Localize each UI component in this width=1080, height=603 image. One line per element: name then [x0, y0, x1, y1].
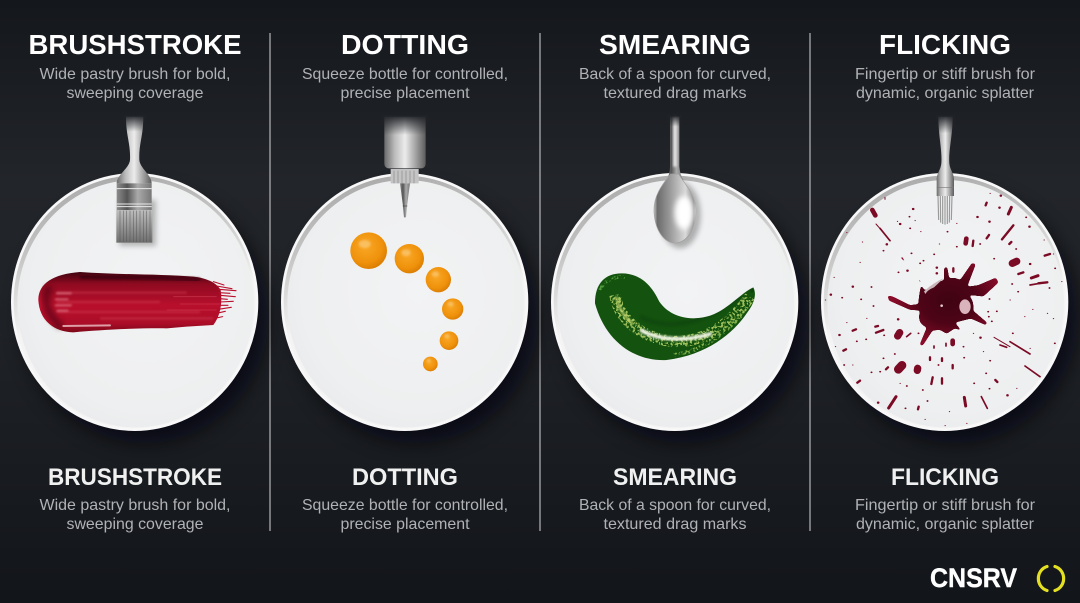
description: smearing: Back of a spoon for curved,	[579, 66, 771, 83]
description: dotting: Squeeze bottle for controlled,	[302, 66, 508, 83]
lower heading: smearing: SMEARING	[613, 464, 737, 491]
description: brushstroke: sweeping coverage	[66, 85, 204, 102]
panel: smearing	[551, 29, 809, 533]
panel: dotting	[281, 29, 539, 533]
plate with splatter	[821, 115, 1079, 443]
panel: brushstroke	[11, 29, 269, 533]
lower description: smearing: textured drag marks	[604, 516, 746, 533]
description: dotting: precise placement	[340, 85, 470, 102]
divider lines	[270, 33, 810, 531]
lower description: smearing: Back of a spoon for curved,	[579, 497, 771, 514]
description: flicking: dynamic, organic splatter	[856, 85, 1035, 102]
plate with red brush stroke	[11, 115, 269, 443]
heading: smearing: SMEARING	[599, 29, 751, 60]
lower description: dotting: precise placement	[340, 516, 470, 533]
lower description: flicking: dynamic, organic splatter	[856, 516, 1035, 533]
icon: squeeze bottle	[382, 115, 428, 217]
sauce: six orange dots	[350, 232, 463, 371]
icon: pastry brush	[116, 115, 156, 246]
heading: dotting: DOTTING	[341, 29, 469, 60]
description: brushstroke: Wide pastry brush for bold,	[40, 66, 230, 83]
icon: logo ring	[1038, 566, 1064, 590]
plate with orange dots	[281, 115, 539, 443]
heading: brushstroke: BRUSHSTROKE	[28, 29, 242, 60]
lower description: flicking: Fingertip or stiff brush for	[855, 497, 1036, 514]
lower description: dotting: Squeeze bottle for controlled,	[302, 497, 508, 514]
icon: stiff brush	[936, 115, 955, 225]
logo: CNSRV: CNSRV	[930, 563, 1017, 593]
description: flicking: Fingertip or stiff brush for	[855, 66, 1036, 83]
lower description: brushstroke: sweeping coverage	[66, 516, 204, 533]
icon: spoon	[654, 115, 701, 248]
description: smearing: textured drag marks	[604, 85, 746, 102]
sauce: red stroke	[38, 272, 236, 332]
sauce: green smear	[595, 273, 755, 360]
lower heading: dotting: DOTTING	[352, 464, 458, 491]
plate with green smear	[551, 115, 809, 443]
panel: flicking	[821, 29, 1079, 533]
lower heading: flicking: FLICKING	[891, 464, 999, 491]
lower heading: brushstroke: BRUSHSTROKE	[48, 464, 222, 491]
heading: flicking: FLICKING	[879, 29, 1011, 60]
lower description: brushstroke: Wide pastry brush for bold,	[40, 497, 230, 514]
sauce: splatter	[825, 193, 1062, 426]
